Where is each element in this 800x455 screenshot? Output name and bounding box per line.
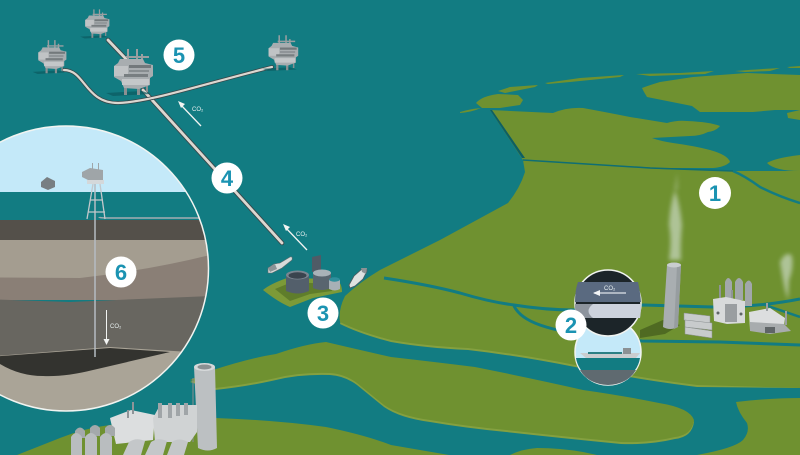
- badge 1: 1: [709, 181, 721, 206]
- circle: pipeline section: CO₂: [604, 286, 616, 292]
- arrow: CO2 near platforms: CO₂: [192, 107, 204, 113]
- ship: east: [349, 268, 367, 288]
- icon: platform east: [262, 35, 298, 71]
- arrow: CO2 into reservoir: [104, 310, 122, 345]
- circle: ship at sea: [575, 319, 641, 385]
- ship: [580, 348, 640, 358]
- tank: tower: [312, 255, 321, 272]
- land: south-east shore: [697, 398, 800, 455]
- land: north peninsula: [490, 108, 730, 168]
- well: [94, 184, 96, 357]
- badge 4: [212, 162, 242, 194]
- land: delta island: [190, 342, 694, 444]
- jacket legs: [87, 184, 105, 219]
- terminal: island with tanks and ships: [263, 255, 367, 307]
- pipeline: offshore trunk line: [64, 40, 282, 243]
- tanks: [71, 425, 188, 455]
- icon: platform central: [106, 49, 153, 96]
- seabed pipe: [99, 217, 210, 218]
- badge 5: 5: [173, 43, 185, 68]
- storage blocks: [684, 313, 712, 338]
- offshore platforms: [33, 9, 298, 96]
- topsides: [82, 163, 104, 184]
- rivers: [384, 160, 800, 345]
- badge 3: [308, 298, 338, 328]
- land: east islet: [767, 155, 800, 171]
- inset 2: pipeline and ship circles: [575, 270, 641, 385]
- sea: [0, 192, 220, 220]
- land: south shore: [510, 448, 597, 455]
- badge 4: 4: [221, 166, 234, 191]
- inset 6: geological cross-section: [0, 125, 220, 420]
- arrow: CO2 into reservoir: CO₂: [110, 324, 122, 330]
- process block: [153, 403, 197, 442]
- badge 5: [164, 40, 194, 70]
- rock layers: [0, 220, 205, 240]
- shadow: [640, 320, 680, 338]
- arrow: CO2 near terminal: CO₂: [296, 232, 308, 238]
- badge 2: [556, 310, 586, 340]
- hall: [110, 402, 155, 444]
- power plant: right: [640, 172, 793, 338]
- badge 1: [699, 177, 731, 209]
- badge 6: 6: [115, 260, 127, 285]
- terminal island: [263, 278, 342, 307]
- tank: medium: [313, 270, 331, 290]
- circle outline: [0, 126, 208, 411]
- icon: platform north: [80, 9, 109, 38]
- sky: [0, 126, 186, 192]
- hall: [749, 303, 791, 334]
- chimney: [193, 363, 217, 450]
- smoke plumes: [669, 172, 793, 300]
- arrow: CO2 near terminal: [283, 224, 308, 250]
- land: north-east islet: [787, 110, 800, 120]
- badge 6: [106, 256, 136, 288]
- pipeline: platform connector: [64, 67, 272, 103]
- reservoir: [0, 348, 170, 376]
- land: barrier islands: [460, 66, 800, 113]
- land: main mainland: [340, 160, 800, 388]
- process building with tanks: [713, 278, 752, 324]
- distant platform: [41, 177, 55, 190]
- icon: platform west: [33, 40, 66, 74]
- arrow: CO2 near platforms: [178, 101, 204, 126]
- badge 3: 3: [317, 301, 329, 326]
- ship: west: [268, 257, 292, 273]
- land: south-west shore: [17, 418, 449, 455]
- power plant: bottom left: [71, 363, 217, 455]
- land: north-east polder: [642, 73, 800, 112]
- tank: small: [329, 277, 340, 290]
- badge 2: 2: [565, 313, 577, 338]
- chimney: [663, 262, 681, 329]
- tank: large: [286, 270, 309, 294]
